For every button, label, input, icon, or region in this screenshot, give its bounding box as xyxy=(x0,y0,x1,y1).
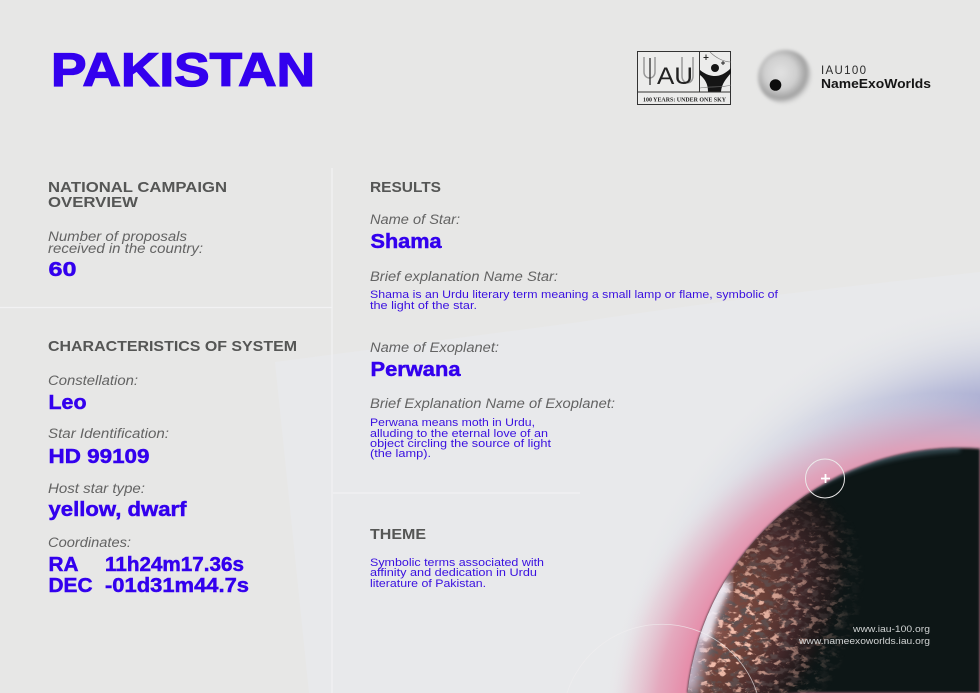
heading xyxy=(48,179,227,211)
theme text: literature of Pakistan. xyxy=(370,578,486,590)
divider lines xyxy=(0,168,580,693)
planet xyxy=(686,446,980,693)
theme text: affinity and dedication in Urdu xyxy=(370,567,537,579)
logo: IAU 100 years: 100 YEARS: UNDER ONE SKY xyxy=(643,96,726,104)
star explanation: Shama is an Urdu literary term meaning a small lamp or flame, symbolic of xyxy=(370,289,779,301)
exoplanet explanation: Brief Explanation Name of Exoplanet: xyxy=(370,396,615,411)
coordinates xyxy=(48,535,249,597)
exoplanet explanation: object circling the source of light xyxy=(370,438,551,450)
constellation: Constellation: xyxy=(48,373,138,388)
panel: national campaign overview xyxy=(48,179,227,281)
title: PAKISTAN xyxy=(51,44,315,97)
faint orbit circle xyxy=(567,624,757,693)
heading: RESULTS xyxy=(370,179,441,196)
logo: NameExoWorlds: IAU100 xyxy=(821,65,866,77)
proposals label: received in the country: xyxy=(48,241,203,256)
star explanation: the light of the star. xyxy=(370,300,477,312)
constellation: Leo xyxy=(48,391,86,414)
light background sweep xyxy=(275,272,980,693)
name of exoplanet: Name of Exoplanet: xyxy=(370,340,499,355)
star explanation: Brief explanation Name Star: xyxy=(370,269,558,284)
host star type: yellow, dwarf xyxy=(48,498,187,521)
name of star xyxy=(370,212,460,253)
constellation xyxy=(48,373,138,414)
website urls: www.iau-100.org xyxy=(852,624,930,635)
website urls xyxy=(798,624,930,647)
coordinates: RA xyxy=(48,553,79,576)
coordinates: 11h24m17.36s xyxy=(105,553,244,576)
logo: IAU 100 years: AU xyxy=(657,63,693,90)
proposals label xyxy=(48,229,203,256)
theme text xyxy=(370,557,544,590)
star identification: HD 99109 xyxy=(48,445,150,468)
planet glow xyxy=(560,270,980,693)
name of exoplanet xyxy=(370,340,499,381)
panel: characteristics of system xyxy=(48,338,297,597)
coordinates: DEC xyxy=(48,574,93,597)
exoplanet explanation: alluding to the eternal love of an xyxy=(370,428,548,440)
proposals label: Number of proposals xyxy=(48,229,187,244)
star identification: Star Identification: xyxy=(48,426,169,441)
marker circle with plus xyxy=(806,459,844,498)
logo: IAU 100 years xyxy=(637,52,731,104)
name of star: Name of Star: xyxy=(370,212,460,227)
star identification xyxy=(48,426,169,468)
exoplanet explanation: (the lamp). xyxy=(370,448,431,460)
website urls: www.nameexoworlds.iau.org xyxy=(798,636,930,647)
logo: NameExoWorlds xyxy=(758,50,931,104)
coordinates: -01d31m44.7s xyxy=(105,574,249,597)
heading: NATIONAL CAMPAIGN xyxy=(48,179,227,196)
host star type xyxy=(48,481,187,521)
name of star: Shama xyxy=(370,230,442,253)
heading: THEME xyxy=(370,526,426,543)
host star type: Host star type: xyxy=(48,481,145,496)
panel: results xyxy=(370,179,779,460)
exoplanet explanation xyxy=(370,396,615,460)
logo: NameExoWorlds: NameExoWorlds xyxy=(821,76,931,91)
heading: CHARACTERISTICS OF SYSTEM xyxy=(48,338,297,355)
exoplanet explanation: Perwana means moth in Urdu, xyxy=(370,417,535,429)
coordinates: Coordinates: xyxy=(48,535,131,550)
proposals value: 60 xyxy=(48,258,76,281)
star explanation xyxy=(370,269,779,312)
name of exoplanet: Perwana xyxy=(370,358,461,381)
panel: theme xyxy=(370,526,544,590)
heading: OVERVIEW xyxy=(48,194,139,211)
theme text: Symbolic terms associated with xyxy=(370,557,544,569)
